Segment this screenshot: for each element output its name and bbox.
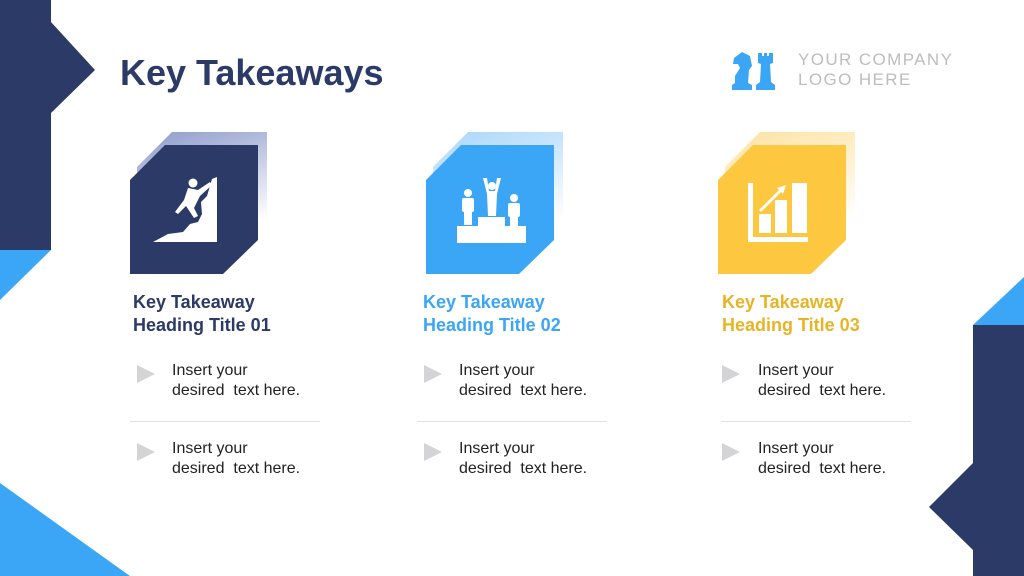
icon card: podium (426, 132, 563, 274)
bullet 1: desired text here. (172, 382, 300, 399)
logo text (798, 50, 953, 89)
bullet 2: Insert your (459, 440, 535, 457)
panel: takeaway 03 (718, 132, 911, 477)
logo text: LOGO HERE (798, 70, 912, 89)
bullet 2: desired text here. (758, 460, 886, 477)
bullet 1: Insert your (172, 362, 248, 379)
panel: takeaway 01 (130, 132, 320, 477)
heading: Heading Title 01 (133, 315, 271, 335)
bullet 2 (137, 440, 300, 477)
title: Key Takeaways (120, 52, 384, 93)
bullet 1 (137, 362, 300, 399)
logo (732, 50, 953, 90)
logo text: YOUR COMPANY (798, 50, 953, 69)
bullet 2: desired text here. (459, 460, 587, 477)
bullet 1: desired text here. (758, 382, 886, 399)
icon card: bar chart (718, 132, 855, 274)
heading: Heading Title 03 (722, 315, 860, 335)
heading: Heading Title 02 (423, 315, 561, 335)
bullet 1 (722, 362, 886, 399)
icon card: climber (130, 132, 267, 274)
bullet 2 (424, 440, 587, 477)
heading: Key Takeaway (133, 292, 255, 312)
bullet 1: Insert your (758, 362, 834, 379)
panel: takeaway 02 (417, 132, 607, 477)
bullet 2 (722, 440, 886, 477)
bullet 2: Insert your (172, 440, 248, 457)
heading (423, 292, 561, 335)
bullet 2: Insert your (758, 440, 834, 457)
bullet 1: desired text here. (459, 382, 587, 399)
bullet 1 (424, 362, 587, 399)
heading: Key Takeaway (722, 292, 844, 312)
heading: Key Takeaway (423, 292, 545, 312)
heading (133, 292, 271, 335)
heading (722, 292, 860, 335)
bullet 2: desired text here. (172, 460, 300, 477)
icon: chess pieces (732, 52, 775, 90)
bullet 1: Insert your (459, 362, 535, 379)
